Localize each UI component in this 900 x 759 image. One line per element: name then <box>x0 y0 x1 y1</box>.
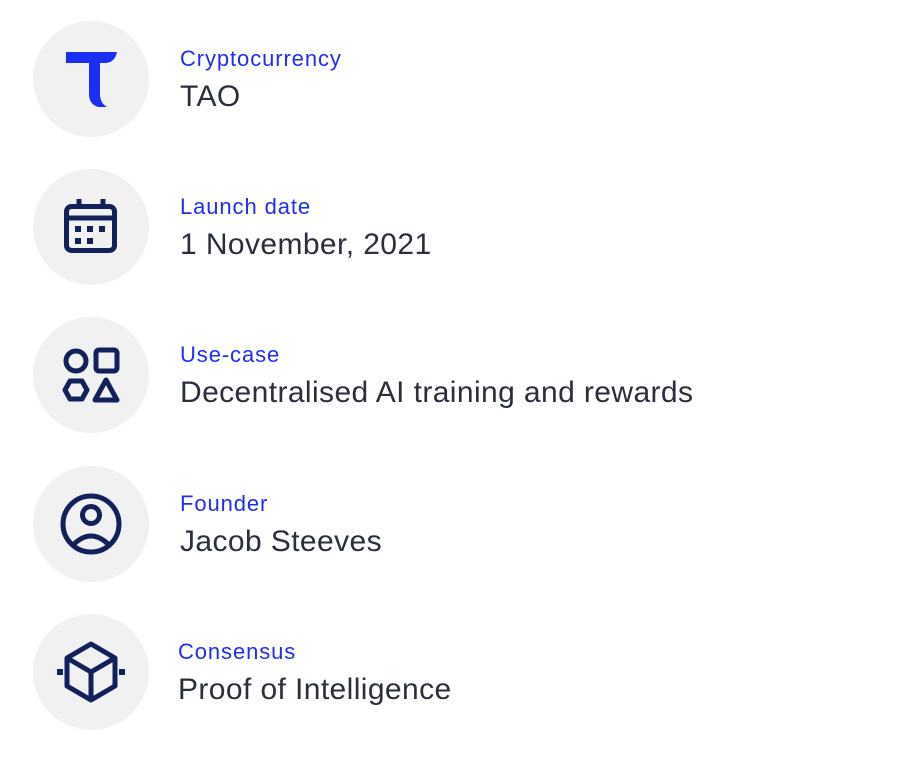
icon: shapes <box>33 317 149 433</box>
value: 1 November, 2021 <box>180 228 432 261</box>
label: Founder <box>180 491 268 516</box>
icon: user <box>33 466 149 582</box>
value: TAO <box>180 80 241 113</box>
icon: cube <box>33 614 149 730</box>
value: Decentralised AI training and rewards <box>180 376 693 409</box>
value: Proof of Intelligence <box>178 673 452 706</box>
value: Jacob Steeves <box>180 525 382 558</box>
label: Launch date <box>180 194 311 219</box>
row: launch date <box>180 194 432 261</box>
icon: TAO logo <box>33 21 149 137</box>
row: cryptocurrency <box>180 46 342 113</box>
label: Consensus <box>178 639 296 664</box>
row: consensus <box>178 639 452 706</box>
icon: calendar <box>33 169 149 285</box>
row: founder <box>180 491 382 558</box>
label: Cryptocurrency <box>180 46 342 71</box>
label: Use-case <box>180 342 280 367</box>
row: use-case <box>180 342 693 409</box>
